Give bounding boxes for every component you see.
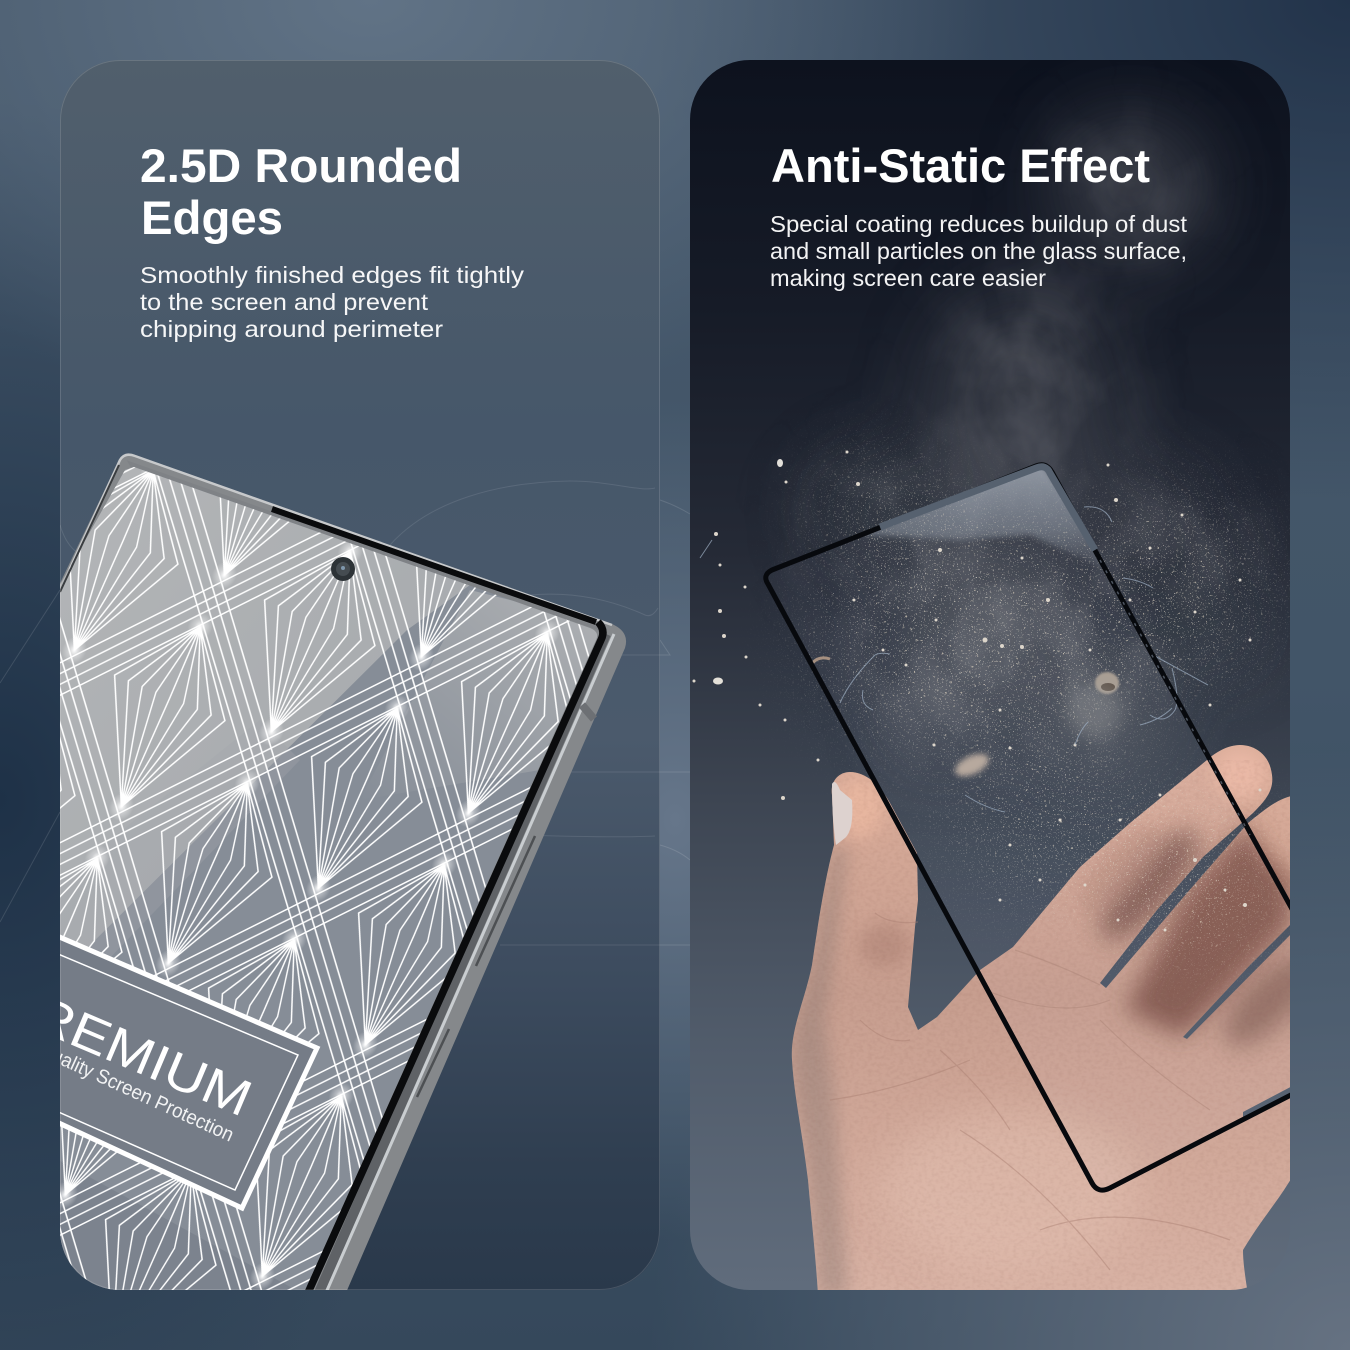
black bezel top bbox=[272, 509, 596, 622]
frame highlight top bbox=[60, 455, 612, 625]
finger two dark tone bbox=[1125, 823, 1292, 1037]
glass tint bbox=[766, 465, 1320, 1190]
black bezel right bbox=[307, 622, 603, 1295]
heading: 2.5D rounded edges bbox=[140, 139, 462, 244]
label box bbox=[60, 934, 320, 1212]
text: anti-static description: making screen care easier bbox=[770, 265, 1046, 291]
camera hole bbox=[331, 557, 355, 581]
panel: 2.5D rounded edges bbox=[0, 60, 660, 1300]
text: anti-static description: and small particles on the glass surface, bbox=[770, 238, 1187, 264]
text: anti-static description bbox=[770, 211, 1188, 291]
thumb tip tint bbox=[836, 778, 884, 838]
panel background bbox=[690, 60, 1290, 1290]
top bezel bbox=[130, 463, 600, 629]
phone with patterned screen protector bbox=[60, 453, 626, 1290]
palm highlight bbox=[880, 1110, 1140, 1270]
left panel border bbox=[60, 60, 660, 1290]
frame light stripe bbox=[325, 634, 614, 1295]
finger tip tint bbox=[1214, 751, 1266, 799]
deco line pattern bbox=[60, 467, 590, 1290]
dust particles bbox=[692, 450, 1262, 932]
glass glare bbox=[860, 460, 1120, 575]
text: rounded edges description: chipping around perimeter bbox=[140, 316, 443, 342]
label subtitle: Quality Screen Protection bbox=[35, 1039, 237, 1146]
thumb knuckle shadow bbox=[859, 923, 911, 967]
speckled edge flecks bbox=[1100, 560, 1250, 835]
dust clumps bbox=[713, 459, 1123, 781]
palm creases bbox=[830, 913, 1230, 1270]
panel inner decorative lines bbox=[60, 481, 660, 945]
label inner outline bbox=[60, 954, 299, 1191]
heading: 2.5D rounded edges: Edges bbox=[141, 191, 283, 244]
glass screen protector border bbox=[766, 465, 1320, 1190]
finger one dark tone bbox=[1086, 816, 1214, 954]
finger one mid tone bbox=[1066, 815, 1174, 925]
hand silhouette bbox=[792, 745, 1300, 1295]
left bezel line bbox=[60, 465, 119, 592]
hand shading clipped bbox=[790, 751, 1329, 1295]
hand left edge shadow bbox=[792, 845, 848, 1295]
frame dark inner channel bbox=[318, 634, 606, 1295]
text: anti-static description: Special coating reduces buildup of dust bbox=[770, 211, 1188, 237]
panel: anti-static effect bbox=[690, 60, 1329, 1295]
dust speckles bbox=[690, 60, 1290, 1290]
hand bbox=[790, 745, 1329, 1295]
text: rounded edges description: to the screen and prevent bbox=[140, 289, 429, 315]
thumb nail bbox=[832, 782, 852, 845]
frame antenna notch bbox=[582, 705, 594, 719]
heading: anti-static effect: Anti-Static Effect bbox=[771, 139, 1150, 192]
skin texture bbox=[790, 760, 1290, 1290]
side buttons bbox=[417, 836, 535, 1097]
glass lit edge bbox=[880, 467, 1095, 550]
text: rounded edges description: Smoothly finished edges fit tightly bbox=[140, 262, 525, 288]
panel background bbox=[60, 60, 660, 1290]
glass base bbox=[60, 564, 538, 1290]
smoke clouds bbox=[820, 115, 1260, 770]
smoke texture bbox=[842, 146, 1258, 738]
text: rounded edges description bbox=[140, 262, 525, 342]
heading: 2.5D rounded edges: 2.5D Rounded bbox=[140, 139, 462, 192]
fibres bbox=[700, 507, 1208, 812]
finger three tone bbox=[1211, 941, 1329, 1059]
premium label bbox=[60, 934, 320, 1212]
faint background outline curves bbox=[0, 500, 690, 945]
glass reflections bbox=[60, 467, 598, 1290]
phone frame bbox=[40, 454, 626, 1295]
